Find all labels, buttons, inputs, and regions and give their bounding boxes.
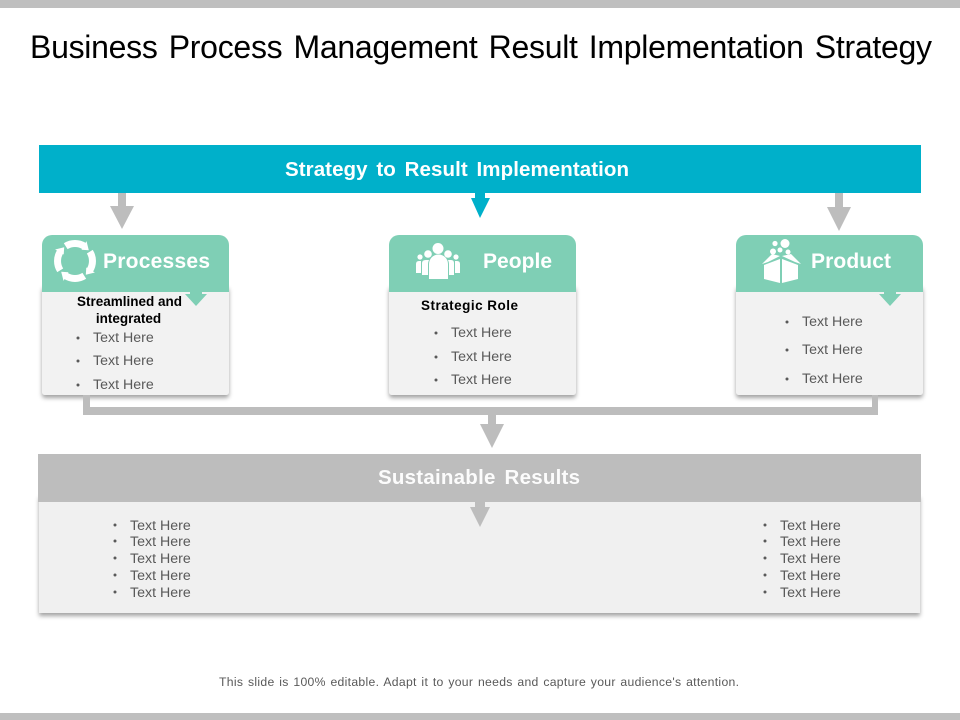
title: Business Process Management Result Implementation Strategy: [30, 29, 932, 65]
icon: circular arrows: [55, 241, 95, 281]
arrow: results pointer: [470, 502, 490, 527]
list: processes: [76, 330, 154, 393]
list: product: [786, 314, 863, 387]
list: results right: Text Here: [780, 534, 841, 550]
list: results right: Text Here: [780, 568, 841, 584]
banner: strategy to result implementation: Strategy to Result Implementation: [285, 158, 629, 181]
list: product: Text Here: [802, 371, 863, 387]
list: results right: Text Here: [780, 551, 841, 567]
list: results left: Text Here: [130, 568, 191, 584]
list: product: Text Here: [802, 342, 863, 358]
arrow: processes pointer: [185, 292, 207, 306]
list: results right: [764, 518, 841, 601]
panel: people: [389, 235, 576, 395]
list: results left: Text Here: [130, 518, 191, 534]
icon: people group: [416, 243, 460, 279]
footer note: This slide is 100% editable. Adapt it to your needs and capture your audience's attention.: [219, 675, 739, 689]
text: processes subheading: Streamlined and: [77, 294, 182, 309]
text: processes subheading: integrated: [96, 311, 161, 326]
list: people: Text Here: [451, 349, 512, 365]
arrow: banner to product: [827, 193, 851, 231]
list: results left: Text Here: [130, 585, 191, 601]
banner: strategy to result implementation: [39, 145, 921, 193]
list: results left: [114, 518, 191, 601]
heading: product: Product: [811, 250, 891, 273]
icon: open box: [762, 239, 801, 283]
list: product: Text Here: [802, 314, 863, 330]
list: processes: Text Here: [93, 353, 154, 369]
list: processes: Text Here: [93, 377, 154, 393]
list: results left: Text Here: [130, 534, 191, 550]
panel: sustainable results: [38, 454, 921, 613]
heading: people: People: [483, 250, 552, 273]
connector: panels to results: [83, 395, 878, 448]
list: results left: Text Here: [130, 551, 191, 567]
list: results right: Text Here: [780, 585, 841, 601]
panel: processes: [42, 235, 229, 395]
list: people: Text Here: [451, 372, 512, 388]
arrow: product pointer: [879, 292, 901, 306]
list: results right: Text Here: [780, 518, 841, 534]
list: processes: Text Here: [93, 330, 154, 346]
heading: sustainable results: Sustainable Results: [378, 466, 580, 489]
arrow: banner to people: [471, 193, 490, 218]
arrow: banner to processes: [110, 193, 134, 229]
text: people subheading: Strategic Role: [421, 298, 518, 313]
list: people: [434, 325, 512, 388]
list: people: Text Here: [451, 325, 512, 341]
heading: processes: Processes: [103, 250, 210, 273]
panel: product: [736, 235, 923, 395]
